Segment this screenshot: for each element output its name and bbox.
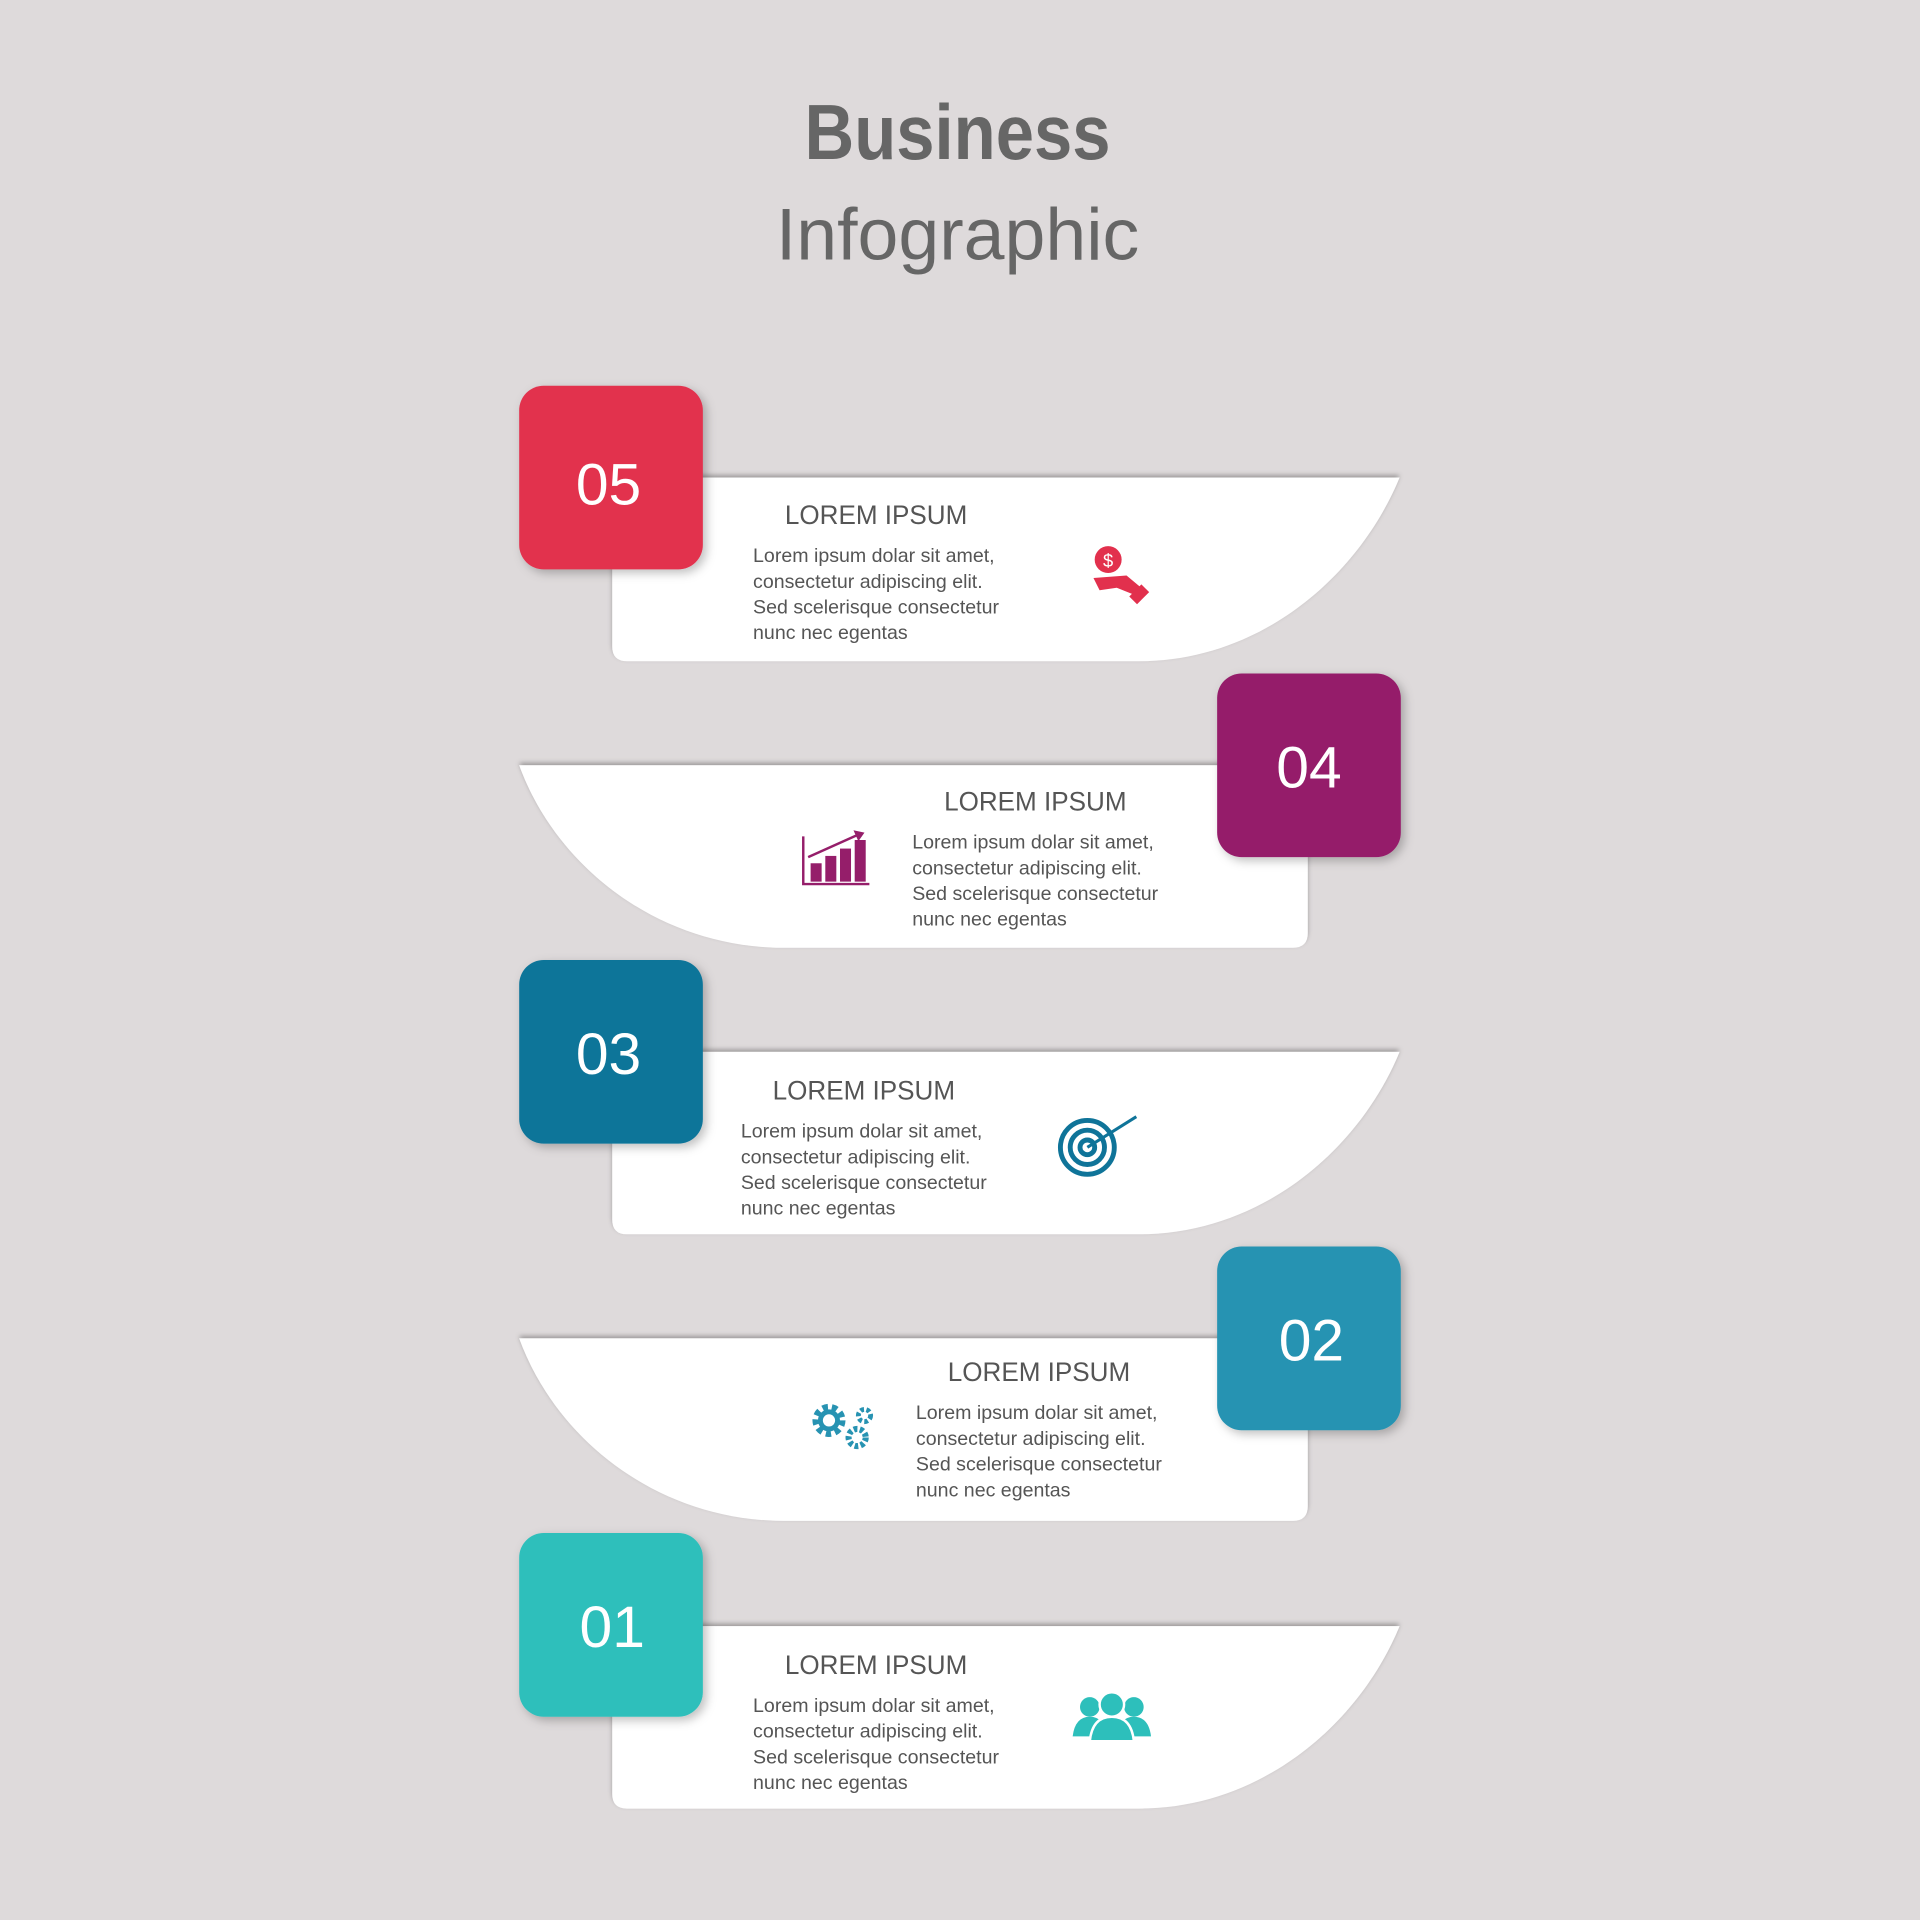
text block 04: Sed scelerisque consectetur (912, 883, 1159, 905)
text block 03: Lorem ipsum dolar sit amet, (741, 1121, 982, 1143)
text block 03 (741, 1076, 987, 1220)
panel: step 02 (519, 1247, 1401, 1521)
text block 03: consectetur adipiscing elit. (741, 1146, 970, 1168)
text block 04: nunc nec egentas (912, 909, 1067, 931)
text block 01 (753, 1650, 999, 1794)
badge 04: 04 (1276, 735, 1342, 800)
text block 03: Sed scelerisque consectetur (741, 1172, 987, 1194)
text block 02: LOREM IPSUM (948, 1357, 1130, 1387)
icon: money hand (1093, 546, 1149, 604)
text block 02 (916, 1357, 1162, 1501)
badge 01 (519, 1533, 703, 1717)
text block 05: Sed scelerisque consectetur (753, 596, 999, 618)
text block 01: consectetur adipiscing elit. (753, 1721, 983, 1743)
title: Infographic (776, 193, 1139, 276)
badge 02 (1217, 1247, 1401, 1430)
panel: step 05 (519, 386, 1400, 661)
text block 05 (753, 500, 999, 644)
panel: step 04 (519, 673, 1401, 948)
text block 03: LOREM IPSUM (773, 1076, 955, 1106)
text block 02: Sed scelerisque consectetur (916, 1454, 1162, 1476)
text block 02: nunc nec egentas (916, 1479, 1071, 1501)
text block 04 (912, 787, 1159, 931)
text block 04: Lorem ipsum dolar sit amet, (912, 832, 1154, 854)
badge 05 (519, 386, 703, 569)
badge 05: 05 (576, 452, 641, 517)
text block 01: LOREM IPSUM (785, 1650, 967, 1680)
icon: bar chart (803, 830, 869, 884)
text block 02: Lorem ipsum dolar sit amet, (916, 1402, 1157, 1424)
badge 03 (519, 960, 703, 1144)
text block 01: nunc nec egentas (753, 1772, 908, 1794)
badge 02: 02 (1279, 1308, 1344, 1373)
panel: step 01 (519, 1533, 1400, 1809)
text block 04: LOREM IPSUM (944, 787, 1127, 817)
text block 03: nunc nec egentas (741, 1198, 896, 1220)
icon: gears (817, 1408, 871, 1446)
icon: money hand: $ (1103, 550, 1113, 571)
text block 01: Lorem ipsum dolar sit amet, (753, 1695, 995, 1717)
panel: step 03 (519, 960, 1400, 1234)
title: Business (804, 88, 1111, 176)
badge 01: 01 (580, 1595, 645, 1660)
title (776, 88, 1139, 276)
text block 05: consectetur adipiscing elit. (753, 571, 983, 593)
text block 01: Sed scelerisque consectetur (753, 1746, 999, 1768)
text block 05: nunc nec egentas (753, 622, 908, 644)
text block 02: consectetur adipiscing elit. (916, 1428, 1146, 1450)
text block 04: consectetur adipiscing elit. (912, 857, 1142, 879)
text block 05: Lorem ipsum dolar sit amet, (753, 545, 995, 567)
icon: target (1060, 1117, 1136, 1174)
badge 04 (1217, 673, 1401, 857)
text block 05: LOREM IPSUM (785, 500, 967, 530)
icon: people (1073, 1692, 1151, 1741)
badge 03: 03 (576, 1022, 641, 1087)
